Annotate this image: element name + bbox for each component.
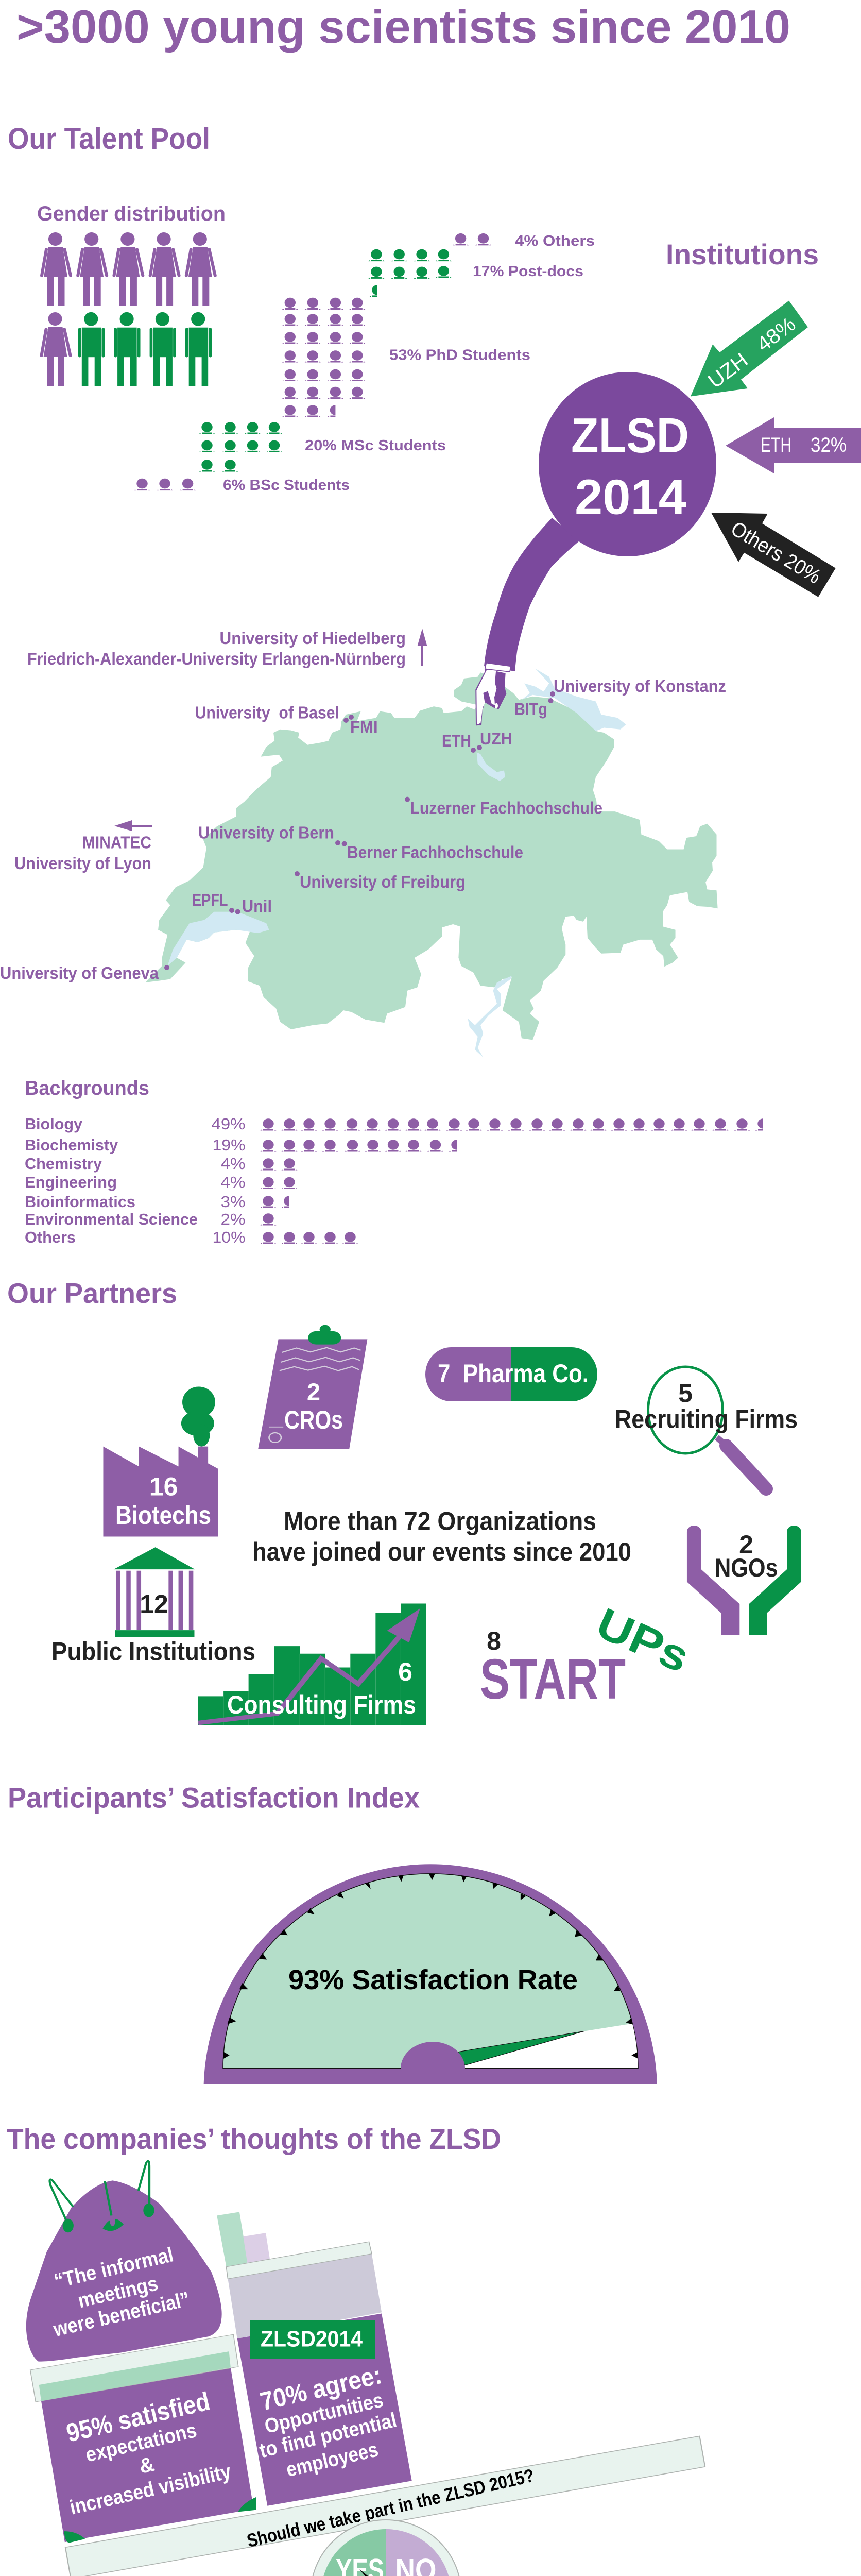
panel: informal meetings bag: “The informal bbox=[52, 2243, 176, 2293]
panel: 95% satisfied weight: 95% satisfied bbox=[64, 2386, 213, 2448]
panel: 70% agree weight: employees bbox=[284, 2438, 381, 2481]
partner: pharma capsule bbox=[425, 1347, 597, 1401]
pictogram rows bbox=[261, 1118, 763, 1244]
category labels: Engineering bbox=[25, 1173, 117, 1191]
gauge inner area bbox=[223, 1874, 638, 2069]
panel: 70% agree weight: to find potential bbox=[257, 2409, 399, 2462]
map location markers bbox=[164, 691, 555, 970]
partner: public institutions bbox=[51, 1547, 255, 1666]
percentages: 49% bbox=[211, 1115, 245, 1133]
badge: ZLSD2014 bbox=[250, 2320, 375, 2359]
label: 53% PhD students: 53% PhD Students bbox=[389, 347, 530, 364]
partner: NGOs hands: NGOs bbox=[715, 1553, 778, 1582]
arrow: UZH 48% bbox=[691, 301, 808, 397]
panel: gender distribution bbox=[37, 202, 226, 386]
icons: 20% MSc students bbox=[199, 422, 282, 472]
panel: career stage pictogram bbox=[134, 233, 595, 494]
partner: biotechs factory: Biotechs bbox=[115, 1501, 211, 1530]
partner: recruiting firms magnifier: 5 bbox=[678, 1379, 693, 1408]
map labels: Luzerner Fachhochschule bbox=[410, 799, 602, 818]
lake: Geneva bbox=[167, 912, 269, 966]
panel: informal meetings bag: were beneficial” bbox=[51, 2288, 192, 2341]
icons: men bbox=[78, 312, 212, 386]
percentages: 4% bbox=[220, 1173, 245, 1191]
gauge: satisfaction rate bbox=[204, 1864, 657, 2084]
callout: 72 organizations bbox=[252, 1506, 631, 1566]
lake: Maggiore bbox=[468, 976, 512, 1057]
map labels bbox=[0, 629, 726, 982]
map labels: University of Freiburg bbox=[300, 872, 466, 891]
partner: public institutions: 12 bbox=[140, 1590, 168, 1619]
partner: public institutions: Public Institutions bbox=[51, 1637, 255, 1666]
map labels: University of Bern bbox=[198, 823, 334, 842]
lake: Bodensee bbox=[522, 669, 626, 731]
arrow: ETH 32%: ETH bbox=[761, 434, 791, 456]
icons: 4% others bbox=[453, 233, 491, 245]
label: 17% post-docs: 17% Post-docs bbox=[473, 263, 583, 280]
heading: satisfaction index: Participants’ Satisfaction Index bbox=[8, 1782, 420, 1814]
map labels: University of Hiedelberg bbox=[219, 629, 406, 648]
percentages: 19% bbox=[212, 1136, 245, 1154]
yes/no dial bbox=[311, 2520, 461, 2576]
panel: 95% satisfied weight: & bbox=[137, 2453, 157, 2478]
map labels: University of Konstanz bbox=[554, 676, 726, 696]
panel: 95% satisfied weight: expectations bbox=[83, 2419, 199, 2467]
arrow: ETH 32%: 32% bbox=[811, 434, 847, 456]
partner: CROs clipboard: 2 bbox=[307, 1378, 320, 1405]
panel: 95% satisfied weight: increased visibility bbox=[67, 2460, 234, 2519]
partner: startups bbox=[480, 1599, 697, 1711]
partner: consulting firms chart: Consulting Firms bbox=[227, 1690, 416, 1719]
map labels: FMI bbox=[350, 717, 378, 736]
map labels: University of Geneva bbox=[0, 963, 159, 982]
category labels: Biochemisty bbox=[25, 1136, 118, 1154]
gauge needle bbox=[458, 2031, 584, 2065]
heading: Institutions: Institutions bbox=[666, 238, 819, 270]
panel: 70% agree weight: Opportunities bbox=[263, 2388, 386, 2438]
gauge hub bbox=[401, 2042, 465, 2071]
partner: consulting firms chart bbox=[198, 1603, 426, 1725]
category labels: Bioinformatics bbox=[25, 1193, 135, 1211]
map labels: UZH bbox=[480, 729, 512, 748]
scale beam: take part question: Should we take part in the ZLSD 2015? bbox=[245, 2465, 536, 2551]
partner: biotechs factory bbox=[103, 1386, 218, 1536]
panel: 70% agree weight: 70% agree: bbox=[257, 2360, 384, 2416]
category labels: Chemistry bbox=[25, 1155, 102, 1173]
arrow: ETH 32% bbox=[726, 417, 861, 473]
heading: gender distribution: Gender distribution bbox=[37, 202, 226, 225]
callout: 72 organizations: have joined our events since 2010 bbox=[252, 1537, 631, 1566]
gauge remaining 7% bbox=[465, 2024, 638, 2068]
badge: ZLSD2014: ZLSD2014 bbox=[261, 2327, 363, 2352]
partner: recruiting firms magnifier: Recruiting Firms bbox=[615, 1404, 798, 1433]
panel: 95% satisfied weight bbox=[30, 2334, 256, 2543]
map of Switzerland bbox=[146, 669, 718, 1057]
category labels bbox=[25, 1115, 198, 1246]
map labels: EPFL bbox=[192, 890, 228, 909]
arrow: Others 20%: Others 20% bbox=[727, 517, 825, 588]
gauge ticks bbox=[223, 1874, 638, 2059]
label: 6% BSc students: 6% BSc Students bbox=[223, 477, 350, 494]
map labels: Friedrich-Alexander-University Erlangen-Nürnberg bbox=[27, 649, 406, 668]
label: 20% MSc students: 20% MSc Students bbox=[305, 437, 446, 454]
partner: startups: 8 bbox=[487, 1626, 501, 1655]
map labels: ETH bbox=[442, 731, 471, 750]
icons: 53% PhD students bbox=[282, 298, 365, 417]
heading: Our Partners: Our Partners bbox=[7, 1277, 177, 1309]
icons: women bbox=[41, 232, 215, 386]
ZLSD 2014 circle bbox=[539, 372, 716, 556]
scale beam: take part question bbox=[65, 2436, 705, 2576]
partner: NGOs hands: 2 bbox=[739, 1530, 753, 1559]
map labels: Unil bbox=[242, 896, 272, 916]
gauge label: 93% Satisfaction Rate bbox=[288, 1964, 578, 1995]
heading: Our Talent Pool: Our Talent Pool bbox=[8, 122, 210, 156]
heading: backgrounds: Backgrounds bbox=[25, 1077, 149, 1099]
percentages: 3% bbox=[220, 1193, 245, 1211]
percentages: 4% bbox=[220, 1155, 245, 1173]
partner: biotechs factory: 16 bbox=[149, 1472, 178, 1501]
panel: informal meetings bag bbox=[26, 2161, 222, 2362]
map labels: University of Basel bbox=[195, 703, 339, 722]
heading: companies' thoughts: The companies’ thoughts of the ZLSD bbox=[7, 2123, 501, 2156]
icons: 6% BSc students bbox=[134, 479, 196, 490]
partner: startups: UPs bbox=[590, 1599, 697, 1682]
pointing sleeve bbox=[484, 518, 579, 671]
panel: informal meetings bag: meetings bbox=[76, 2272, 160, 2313]
category labels: Biology bbox=[25, 1115, 83, 1133]
partner: CROs clipboard: CROs bbox=[284, 1405, 343, 1434]
map labels: MINATEC bbox=[82, 833, 151, 852]
percentages bbox=[211, 1115, 245, 1246]
icon: pointing hand bbox=[475, 663, 511, 725]
icons: 17% post-docs bbox=[368, 249, 452, 297]
ZLSD 2014 circle: ZLSD bbox=[571, 408, 689, 463]
category labels: Others bbox=[25, 1228, 76, 1246]
partner: NGOs hands bbox=[687, 1526, 801, 1635]
arrow: up to Germany bbox=[417, 629, 427, 666]
ZLSD 2014 circle: 2014 bbox=[575, 470, 686, 525]
percentages: 2% bbox=[220, 1210, 245, 1228]
percentages: 10% bbox=[212, 1228, 245, 1246]
arrow: UZH 48%: UZH 48% bbox=[704, 313, 800, 393]
arrow: left to France bbox=[114, 820, 152, 831]
partner: startups: START bbox=[480, 1648, 626, 1711]
partner: CROs clipboard bbox=[258, 1325, 367, 1449]
category labels: Environmental Science bbox=[25, 1210, 198, 1228]
title: >3000 young scientists since 2010 bbox=[16, 1, 790, 53]
panel: backgrounds bbox=[25, 1077, 763, 1246]
panel: 70% agree weight bbox=[217, 2212, 412, 2506]
map labels: BITg bbox=[514, 700, 547, 719]
callout: 72 organizations: More than 72 Organizations bbox=[284, 1506, 596, 1535]
lake: Zurich bbox=[477, 752, 505, 781]
partner: recruiting firms magnifier bbox=[615, 1367, 798, 1489]
map labels: University of Lyon bbox=[14, 854, 151, 873]
partner: pharma capsule: 7 Pharma Co. bbox=[438, 1359, 589, 1388]
label: 4% others: 4% Others bbox=[515, 233, 595, 249]
gauge outer rim bbox=[204, 1864, 657, 2084]
partner: consulting firms chart: 6 bbox=[398, 1657, 412, 1686]
map labels: Berner Fachhochschule bbox=[347, 843, 523, 862]
